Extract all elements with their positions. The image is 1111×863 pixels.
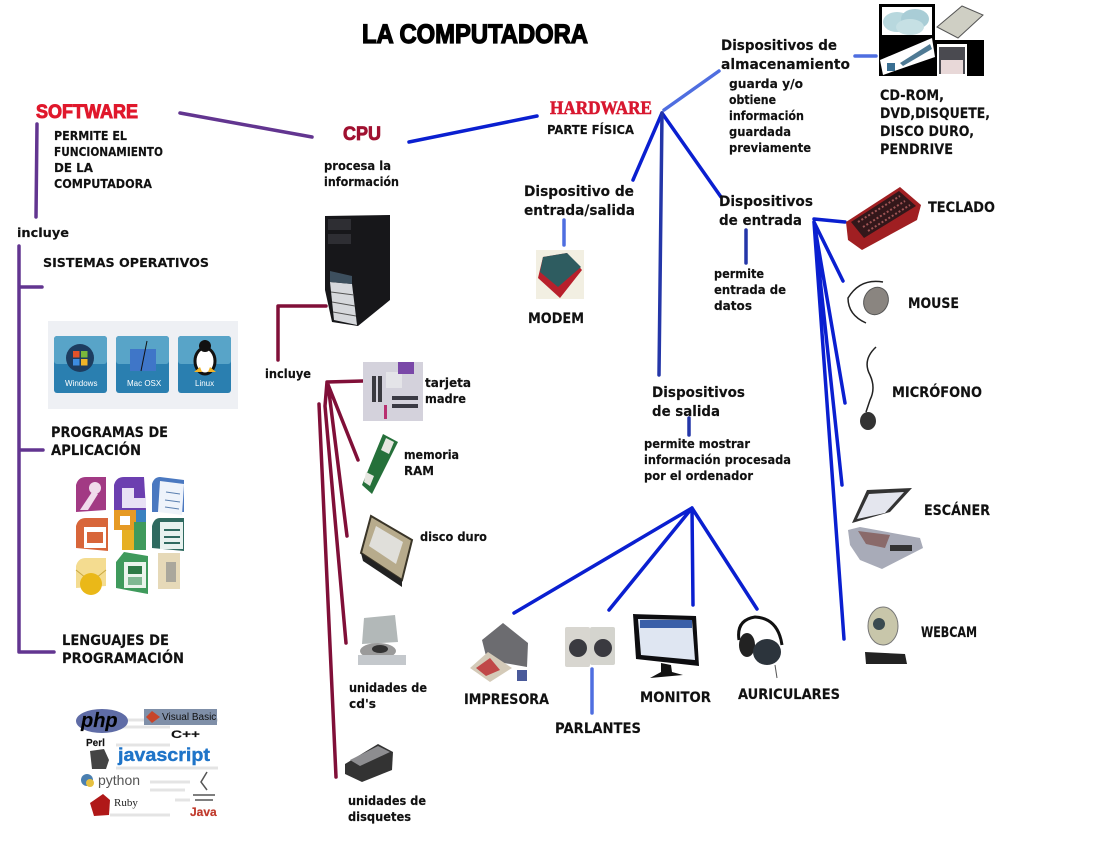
- text: storage examples: CD-ROM,: [880, 88, 944, 104]
- text: storage examples: DISCO DURO,: [880, 124, 974, 140]
- label: teclado: TECLADO: [928, 200, 995, 216]
- heading: dispositivos de entrada: Dispositivos: [719, 194, 813, 210]
- heading: lenguajes de programacion: LENGUAJES DE: [62, 633, 169, 649]
- heading: hardware: HARDWARE: [550, 98, 652, 119]
- icon: keyboard: [846, 187, 921, 250]
- text: salida description: información procesada: [644, 452, 791, 467]
- heading: entrada salida: entrada/salida: [524, 203, 635, 219]
- text: software description: FUNCIONAMIENTO: [54, 144, 163, 159]
- text: storage examples: PENDRIVE: [880, 142, 953, 158]
- connector: speakers label: [590, 669, 594, 713]
- label: unidades de disquetes: unidades de: [348, 793, 426, 808]
- text: storage description: obtiene: [729, 92, 776, 107]
- logos: programming languages: Java: [190, 805, 217, 819]
- label: parlantes: PARLANTES: [555, 721, 641, 737]
- title: LA COMPUTADORA: [362, 19, 588, 49]
- text: storage description: información: [729, 108, 804, 123]
- connector: salida description: [687, 418, 691, 435]
- icon: mac os x: [116, 336, 169, 393]
- text: parte fisica: PARTE FÍSICA: [547, 122, 634, 137]
- heading: dispositivos de almacenamiento: [721, 38, 850, 73]
- connectors: output devices: [514, 508, 757, 613]
- icon: motherboard: [363, 362, 423, 421]
- label: modem: MODEM: [528, 311, 584, 327]
- text: software description: PERMITE EL: [54, 128, 127, 143]
- heading: dispositivos de entrada: [719, 194, 813, 229]
- label: unidades de disquetes: disquetes: [348, 809, 411, 824]
- text: cpu description: [324, 158, 399, 189]
- connector: hardware to storage: [664, 71, 719, 110]
- icon: printer: [470, 623, 528, 682]
- text: storage description: guarda y/o: [729, 76, 803, 91]
- icon: storage media: [879, 4, 984, 76]
- heading: cpu: CPU: [343, 124, 381, 145]
- label: incluye cpu: incluye: [265, 366, 311, 381]
- heading: programas de aplicacion: [51, 425, 168, 459]
- icon: modem: [536, 250, 584, 299]
- heading: dispositivos de almacenamiento: Dispositivos de: [721, 38, 837, 54]
- label: tarjeta madre: madre: [425, 391, 466, 406]
- text: cpu description: procesa la: [324, 158, 391, 173]
- logos: programming languages: Ruby: [114, 797, 138, 809]
- icon: scanner: [848, 488, 923, 569]
- icon: microphone: [860, 347, 876, 430]
- text: salida description: [644, 436, 791, 483]
- icon: hard disk: [361, 516, 412, 587]
- text: software description: DE LA: [54, 160, 93, 175]
- connectors: input devices: [814, 219, 845, 639]
- heading: entrada salida: Dispositivo de: [524, 184, 634, 200]
- label: unidades de disquetes: [348, 793, 426, 824]
- icon: mac os x: Mac OSX: [127, 379, 162, 388]
- label: disco duro: disco duro: [420, 529, 487, 544]
- connector: software bracket: [19, 246, 54, 652]
- connectors: cpu components: [319, 381, 363, 777]
- icon: computer tower: [325, 215, 390, 326]
- heading: dispositivos de entrada: de entrada: [719, 213, 802, 229]
- connector: software to cpu: [180, 113, 312, 137]
- connector: software to incluye: [36, 124, 37, 217]
- icon: cd drive: [358, 615, 406, 665]
- label: unidades de cds: cd's: [349, 696, 376, 711]
- text: entrada description: [714, 266, 786, 313]
- icons: office applications: [76, 477, 184, 595]
- heading: dispositivos de salida: de salida: [652, 404, 720, 420]
- connector: entrada salida to modem: [562, 220, 566, 245]
- label: mouse: MOUSE: [908, 296, 959, 312]
- logos: programming languages: php: [80, 710, 118, 732]
- label: memoria ram: memoria: [404, 447, 459, 462]
- heading: sistemas operativos: SISTEMAS OPERATIVOS: [43, 255, 209, 270]
- logos: programming languages: [76, 709, 218, 819]
- label: escaner: ESCÁNER: [924, 502, 990, 519]
- connector: storage to icons: [855, 54, 876, 58]
- label: monitor: MONITOR: [640, 690, 711, 706]
- icon: linux: Linux: [195, 379, 214, 388]
- label: webcam: WEBCAM: [921, 625, 977, 641]
- icon: windows: [54, 336, 107, 393]
- logos: programming languages: python: [98, 772, 140, 788]
- text: salida description: permite mostrar: [644, 436, 751, 451]
- heading: dispositivos de almacenamiento: almacenamiento: [721, 57, 850, 73]
- icon: ram: [362, 434, 398, 494]
- connector: hardware to salida: [659, 113, 662, 375]
- label: impresora: IMPRESORA: [464, 692, 549, 708]
- logos: programming languages: C++: [171, 729, 200, 741]
- logos: programming languages: Perl: [86, 738, 105, 749]
- connector: hardware branches: [633, 113, 721, 197]
- text: entrada description: permite: [714, 266, 764, 281]
- text: entrada description: entrada de: [714, 282, 786, 297]
- heading: lenguajes de programacion: PROGRAMACIÓN: [62, 649, 184, 667]
- label: auriculares: AURICULARES: [738, 687, 840, 703]
- heading: software: SOFTWARE: [36, 102, 138, 123]
- heading: dispositivos de salida: [652, 385, 745, 420]
- text: storage description: [729, 76, 811, 155]
- text: entrada description: datos: [714, 298, 752, 313]
- icon: floppy drive: [345, 744, 393, 782]
- icon panel: operating systems: [48, 321, 238, 409]
- heading: dispositivos de salida: Dispositivos: [652, 385, 745, 401]
- logos: programming languages: javascript: [117, 745, 210, 765]
- icon: speakers: [565, 627, 615, 667]
- icon: webcam: [865, 607, 907, 664]
- heading: entrada salida: [524, 184, 635, 219]
- label: microfono: MICRÓFONO: [892, 383, 982, 401]
- label: incluye software: incluye: [17, 225, 69, 240]
- label: unidades de cds: unidades de: [349, 680, 427, 695]
- connector: hardware to cpu: [409, 116, 537, 142]
- text: salida description: por el ordenador: [644, 468, 754, 483]
- text: storage examples: [880, 88, 990, 158]
- icon: linux: [178, 336, 231, 393]
- label: memoria ram: RAM: [404, 463, 434, 478]
- text: software description: [54, 128, 163, 191]
- heading: lenguajes de programacion: [62, 633, 184, 667]
- heading: programas de aplicacion: PROGRAMAS DE: [51, 425, 168, 441]
- icon: headphones: [739, 617, 782, 678]
- text: storage description: previamente: [729, 140, 811, 155]
- logos: programming languages: Visual Basic: [162, 712, 216, 723]
- icon: mouse: [848, 281, 893, 323]
- icon: monitor: [633, 614, 699, 678]
- icon: windows: Windows: [65, 379, 97, 388]
- text: storage description: guardada: [729, 124, 791, 139]
- text: cpu description: información: [324, 174, 399, 189]
- text: software description: COMPUTADORA: [54, 176, 152, 191]
- label: tarjeta madre: [425, 375, 471, 406]
- connector: tower to incluye: [278, 306, 326, 360]
- label: tarjeta madre: tarjeta: [425, 375, 471, 390]
- text: storage examples: DVD,DISQUETE,: [880, 106, 990, 122]
- label: unidades de cds: [349, 680, 427, 711]
- label: memoria ram: [404, 447, 459, 478]
- heading: programas de aplicacion: APLICACIÓN: [51, 441, 141, 459]
- connector: entrada description: [744, 230, 748, 263]
